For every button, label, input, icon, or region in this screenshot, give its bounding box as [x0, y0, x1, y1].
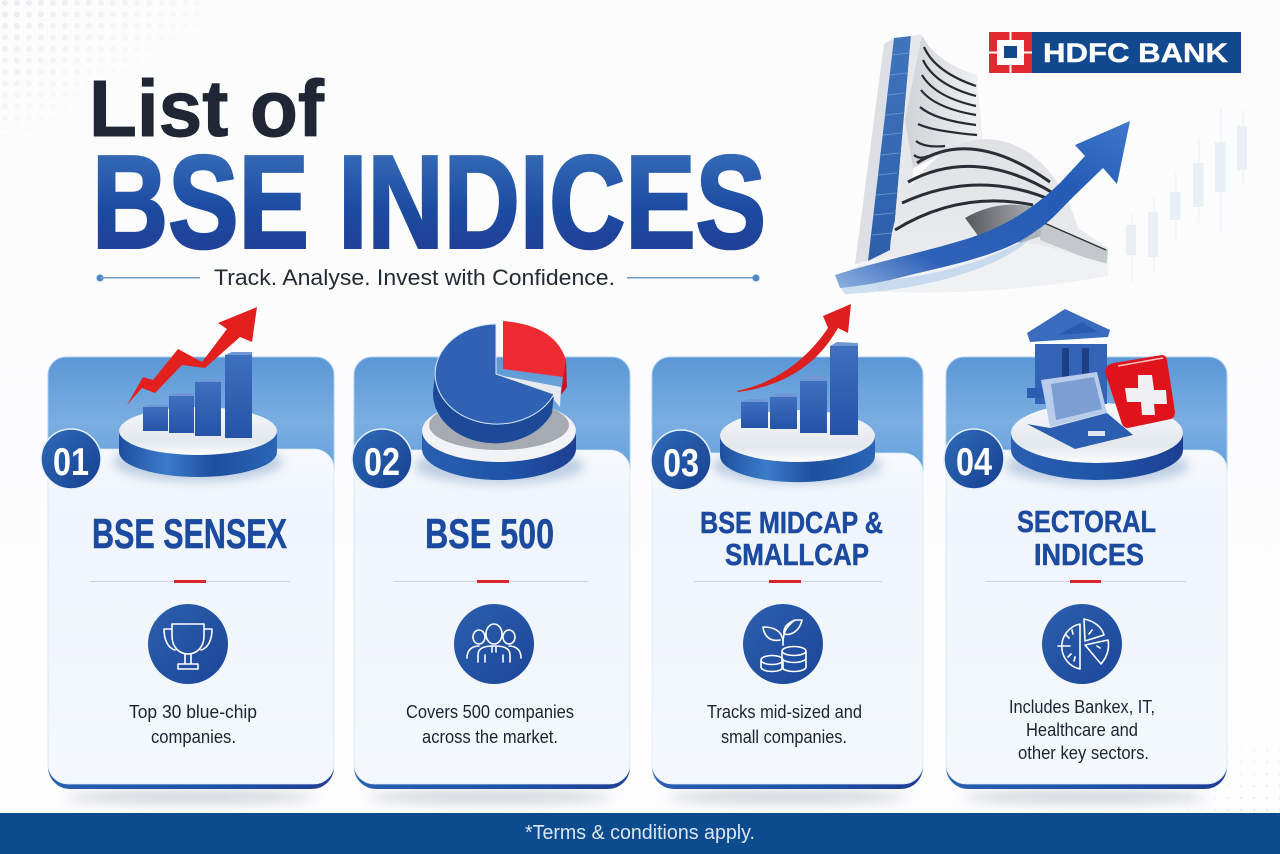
description: [707, 702, 862, 747]
panel: card 4 Sectoral Indices: [944, 309, 1227, 789]
icon: people: [454, 604, 534, 684]
pedestal with bank, laptop and medical icons: [1005, 309, 1189, 484]
laptop: [1027, 372, 1133, 449]
subtitle with rule lines: [96, 265, 760, 290]
footer bar: [0, 813, 1280, 854]
number badge 01: 01: [53, 441, 89, 484]
divider: [694, 580, 882, 583]
pedestal and bar chart icon: [113, 307, 283, 482]
panel: card 2 BSE 500: [352, 321, 630, 789]
number badge 02: 02: [364, 441, 400, 484]
heading: [700, 505, 883, 572]
red medical box: [1105, 355, 1175, 428]
icon: plant and coins: [743, 604, 823, 684]
heading: SMALLCAP: [725, 537, 869, 572]
heading: INDICES: [1034, 537, 1144, 572]
heading: BSE 500: [425, 510, 554, 557]
divider: [90, 580, 290, 583]
pale swoosh under arrow: [838, 232, 1037, 294]
number badge 04: [944, 429, 1004, 489]
divider: [393, 580, 588, 583]
description: across the market.: [422, 727, 558, 747]
panel: card 1 BSE Sensex: [41, 307, 334, 789]
title: List of: List of: [89, 64, 324, 153]
bank building: [1027, 309, 1110, 404]
heading: SECTORAL: [1017, 504, 1156, 539]
description: companies.: [151, 727, 236, 747]
number badge 01: [41, 429, 101, 489]
building tower: [855, 34, 924, 264]
logo mark: [989, 32, 1032, 73]
pedestal and pie chart icon: [414, 321, 584, 484]
divider: [985, 580, 1186, 583]
card shadows: [65, 791, 1207, 803]
building curved wing: [905, 35, 983, 168]
title: BSE INDICES: BSE INDICES: [92, 128, 766, 276]
icon: pie segments: [1042, 604, 1122, 684]
description: small companies.: [721, 727, 847, 747]
footer bar: *Terms & conditions apply.: [525, 822, 755, 844]
description: Top 30 blue-chip: [129, 702, 257, 722]
logo: HDFC Bank: [989, 32, 1241, 73]
description: [1009, 697, 1155, 763]
red arrow: [127, 307, 257, 405]
subtitle with rule lines: Track. Analyse. Invest with Confidence.: [214, 265, 615, 290]
description: other key sectors.: [1018, 743, 1149, 763]
number badge 04: 04: [956, 441, 992, 484]
number badge 03: 03: [663, 442, 699, 485]
number badge 03: [651, 430, 711, 490]
heading: [1017, 504, 1156, 572]
building blue growth arrow: [835, 121, 1130, 288]
description: Covers 500 companies: [406, 702, 574, 722]
number badge 02: [352, 429, 412, 489]
background candlestick chart: [1126, 108, 1247, 283]
description: [129, 702, 257, 747]
heading: BSE MIDCAP &: [700, 505, 883, 540]
description: [406, 702, 574, 747]
panel: card 3 BSE Midcap and Smallcap: [651, 304, 923, 789]
description: Includes Bankex, IT,: [1009, 697, 1155, 717]
description: Tracks mid-sized and: [707, 702, 862, 722]
logo: HDFC Bank: HDFC BANK: [1043, 38, 1229, 68]
red curved arrow: [737, 304, 851, 392]
heading: BSE SENSEX: [92, 510, 287, 557]
icon: trophy: [148, 604, 228, 684]
building dome: [850, 139, 1108, 293]
description: Healthcare and: [1026, 720, 1138, 740]
pedestal and bar chart icon: [712, 304, 882, 484]
illustration: BSE building with rising arrow: [835, 34, 1130, 294]
